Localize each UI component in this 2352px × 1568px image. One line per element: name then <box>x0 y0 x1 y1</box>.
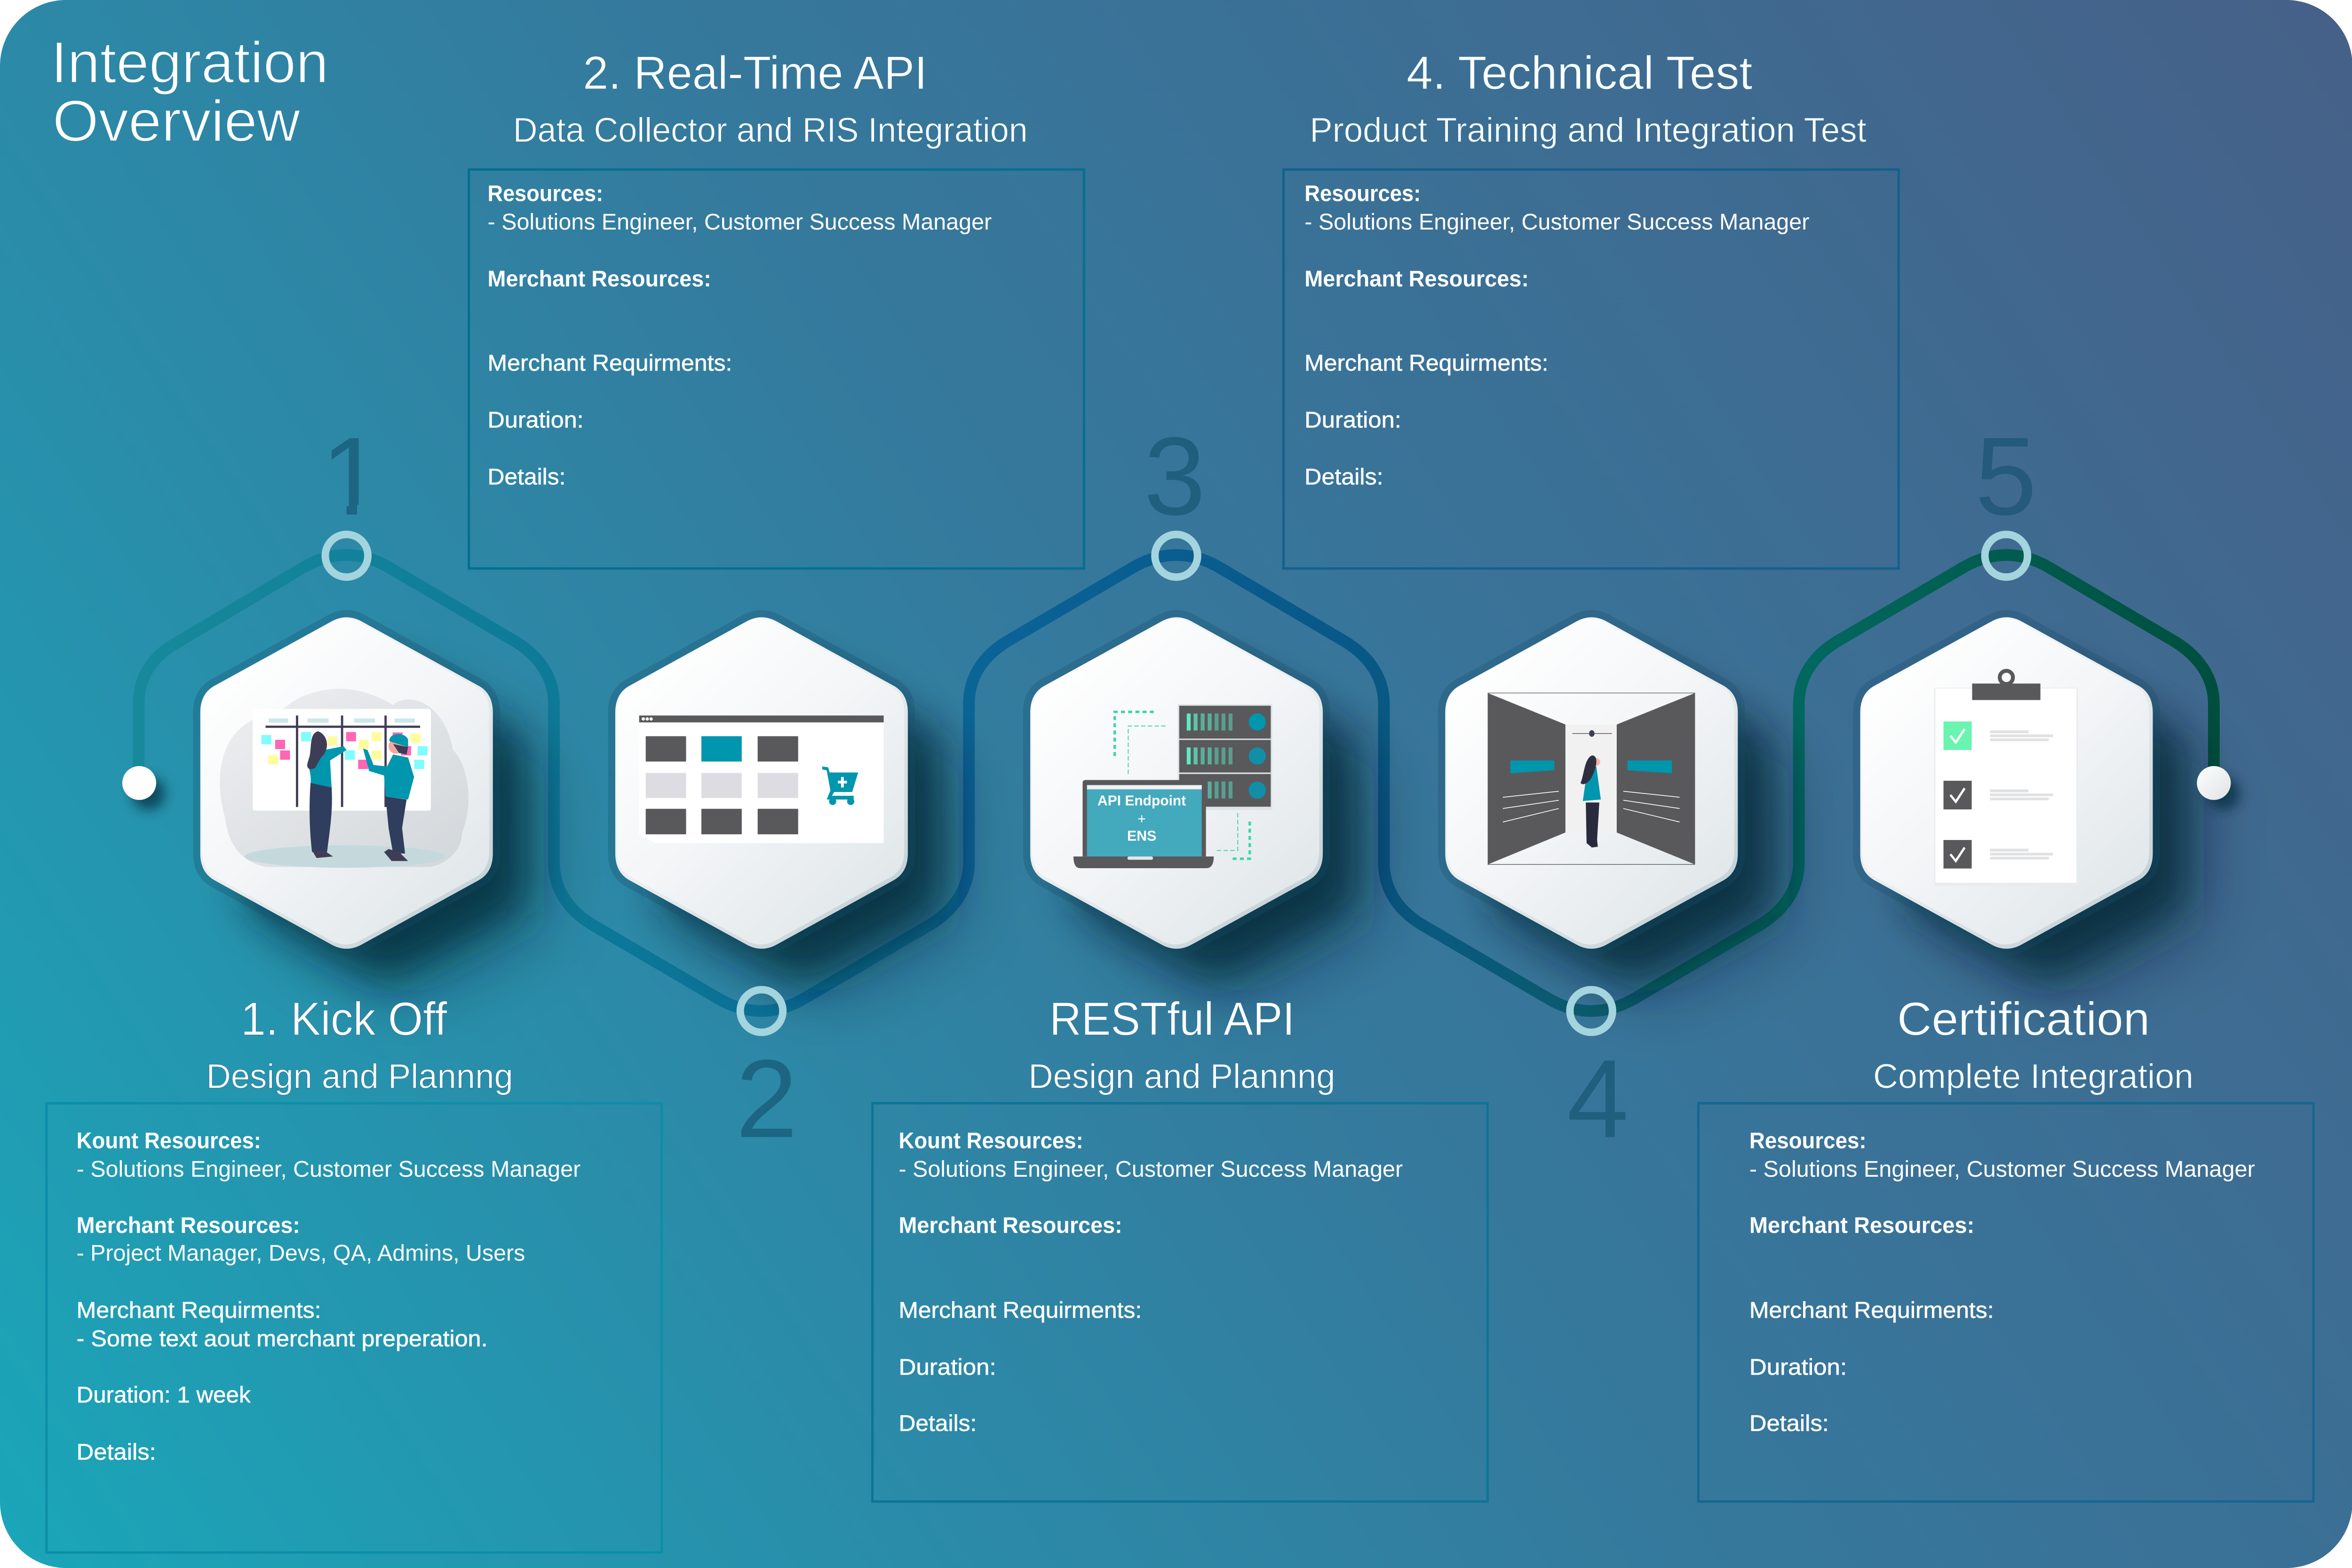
panel: step 3 details <box>873 1103 1487 1502</box>
step number 5: 5 <box>1975 414 2037 539</box>
title: Overview <box>53 88 301 154</box>
text: Kount resources: Kount Resources: <box>898 1129 1083 1154</box>
text: details: Details: <box>488 465 565 490</box>
hexagon card 2: real-time API <box>615 617 959 998</box>
text: resources: - Solutions Engineer, Customer Success Manager <box>1304 210 1810 235</box>
step number 3: 3 <box>1144 414 1206 539</box>
icon: clipboard checklist <box>1934 671 2078 886</box>
text: merchant requirements: - Some text aout merchant preperation. <box>77 1327 488 1352</box>
text: duration: Duration: <box>1304 408 1401 433</box>
panel: step 5 details <box>1698 1103 2313 1502</box>
text: merchant requirements: Merchant Requirments: <box>898 1298 1142 1323</box>
woman standing <box>1581 755 1601 847</box>
title <box>51 30 328 154</box>
laptop with screen label <box>1073 780 1214 868</box>
hexagon card 5: certification <box>1860 617 2204 998</box>
hexagon card 4: technical test <box>1445 617 1789 998</box>
text: merchant requirements: Merchant Requirments: <box>488 351 732 376</box>
text: Kount resources: - Solutions Engineer, Customer Success Manager <box>898 1157 1403 1182</box>
text: details: Details: <box>1749 1411 1829 1436</box>
icon: server stack and laptop <box>1073 704 1272 868</box>
heading: step 3: RESTful API <box>1049 993 1295 1045</box>
panel: step 1 details <box>47 1103 662 1552</box>
text: Kount resources <box>77 1129 580 1182</box>
text: merchant resources: Merchant Resources: <box>1304 267 1529 292</box>
text: duration: Duration: 1 week <box>77 1383 251 1408</box>
text: merchant resources: Merchant Resources: <box>488 267 711 292</box>
text: resources: Resources: <box>1749 1129 1867 1154</box>
text: merchant resources: Merchant Resources: <box>77 1213 300 1238</box>
text: details: Details: <box>1304 465 1383 490</box>
ring marker 4 <box>1570 990 1613 1032</box>
icon: kanban board with two people <box>220 689 469 868</box>
text: Kount resources: - Solutions Engineer, Customer Success Manager <box>77 1157 580 1182</box>
text: Kount resources <box>898 1129 1403 1182</box>
panel: step 2 details <box>469 169 1084 569</box>
step number 2: 2 <box>736 1037 797 1161</box>
text: merchant resources: - Project Manager, Devs, QA, Admins, Users <box>77 1241 525 1266</box>
heading: step 5: Complete Integration <box>1873 1057 2193 1095</box>
hexagon card 1: kick off <box>200 617 544 998</box>
text: resources <box>1749 1129 2255 1182</box>
title: Integration <box>51 30 328 95</box>
heading: step 4 <box>1310 47 1867 149</box>
heading: step 1: Design and Plannng <box>207 1057 513 1095</box>
heading: step 1 <box>207 993 513 1095</box>
laptop with screen label: ENS <box>1127 829 1156 844</box>
heading: step 3 <box>1028 993 1335 1095</box>
step number 1: 1 <box>321 414 383 539</box>
laptop with screen label: API Endpoint <box>1097 793 1186 809</box>
heading: step 5 <box>1873 993 2193 1095</box>
text: duration: Duration: <box>898 1355 996 1380</box>
text: duration: Duration: <box>1749 1355 1847 1380</box>
text: merchant requirements: Merchant Requirments: <box>1304 351 1548 376</box>
text: merchant requirements <box>77 1298 488 1352</box>
timeline path connecting steps <box>139 555 2214 1011</box>
text: details: Details: <box>898 1411 977 1436</box>
heading: step 4: 4. Technical Test <box>1406 47 1752 99</box>
ring marker 3 <box>1155 534 1198 577</box>
man figure <box>363 734 414 861</box>
text: merchant resources <box>77 1213 525 1266</box>
panel: step 4 details <box>1284 169 1899 569</box>
icon: person in corridor between two server walls <box>1488 693 1695 864</box>
step number 4: 4 <box>1567 1037 1629 1161</box>
icon: web store window with product grid and cart <box>639 715 884 843</box>
ring marker 5 <box>1985 534 2027 577</box>
text: Kount resources: Kount Resources: <box>77 1129 261 1154</box>
heading: step 4: Product Training and Integration Test <box>1310 111 1867 149</box>
start dot <box>122 766 165 810</box>
ring marker 2 <box>740 990 783 1032</box>
text: resources: - Solutions Engineer, Customer Success Manager <box>488 210 992 235</box>
text: duration: Duration: <box>488 408 584 433</box>
icon: shopping cart <box>822 767 858 805</box>
ring marker 1 <box>325 534 368 577</box>
heading: step 3: Design and Plannng <box>1028 1057 1335 1095</box>
heading: step 5: Certification <box>1897 993 2150 1045</box>
hexagon card 3: RESTful API <box>1030 617 1374 998</box>
text: merchant requirements: Merchant Requirments: <box>77 1298 321 1323</box>
laptop with screen label: + <box>1137 811 1146 827</box>
text: details: Details: <box>77 1440 156 1465</box>
heading: step 1: 1. Kick Off <box>241 993 447 1045</box>
text: resources <box>1304 181 1810 235</box>
heading: step 2 <box>513 47 1028 149</box>
text: resources: Resources: <box>488 181 603 206</box>
heading: step 2: Data Collector and RIS Integration <box>513 111 1028 149</box>
woman figure <box>307 731 347 858</box>
text: merchant requirements: Merchant Requirments: <box>1749 1298 1994 1323</box>
text: resources: - Solutions Engineer, Customer Success Manager <box>1749 1157 2255 1182</box>
text: resources: Resources: <box>1304 181 1421 206</box>
text: merchant resources: Merchant Resources: <box>898 1213 1122 1238</box>
text: resources <box>488 181 992 235</box>
end dot <box>2197 766 2240 810</box>
text: merchant resources: Merchant Resources: <box>1749 1213 1974 1238</box>
heading: step 2: 2. Real-Time API <box>583 47 927 99</box>
